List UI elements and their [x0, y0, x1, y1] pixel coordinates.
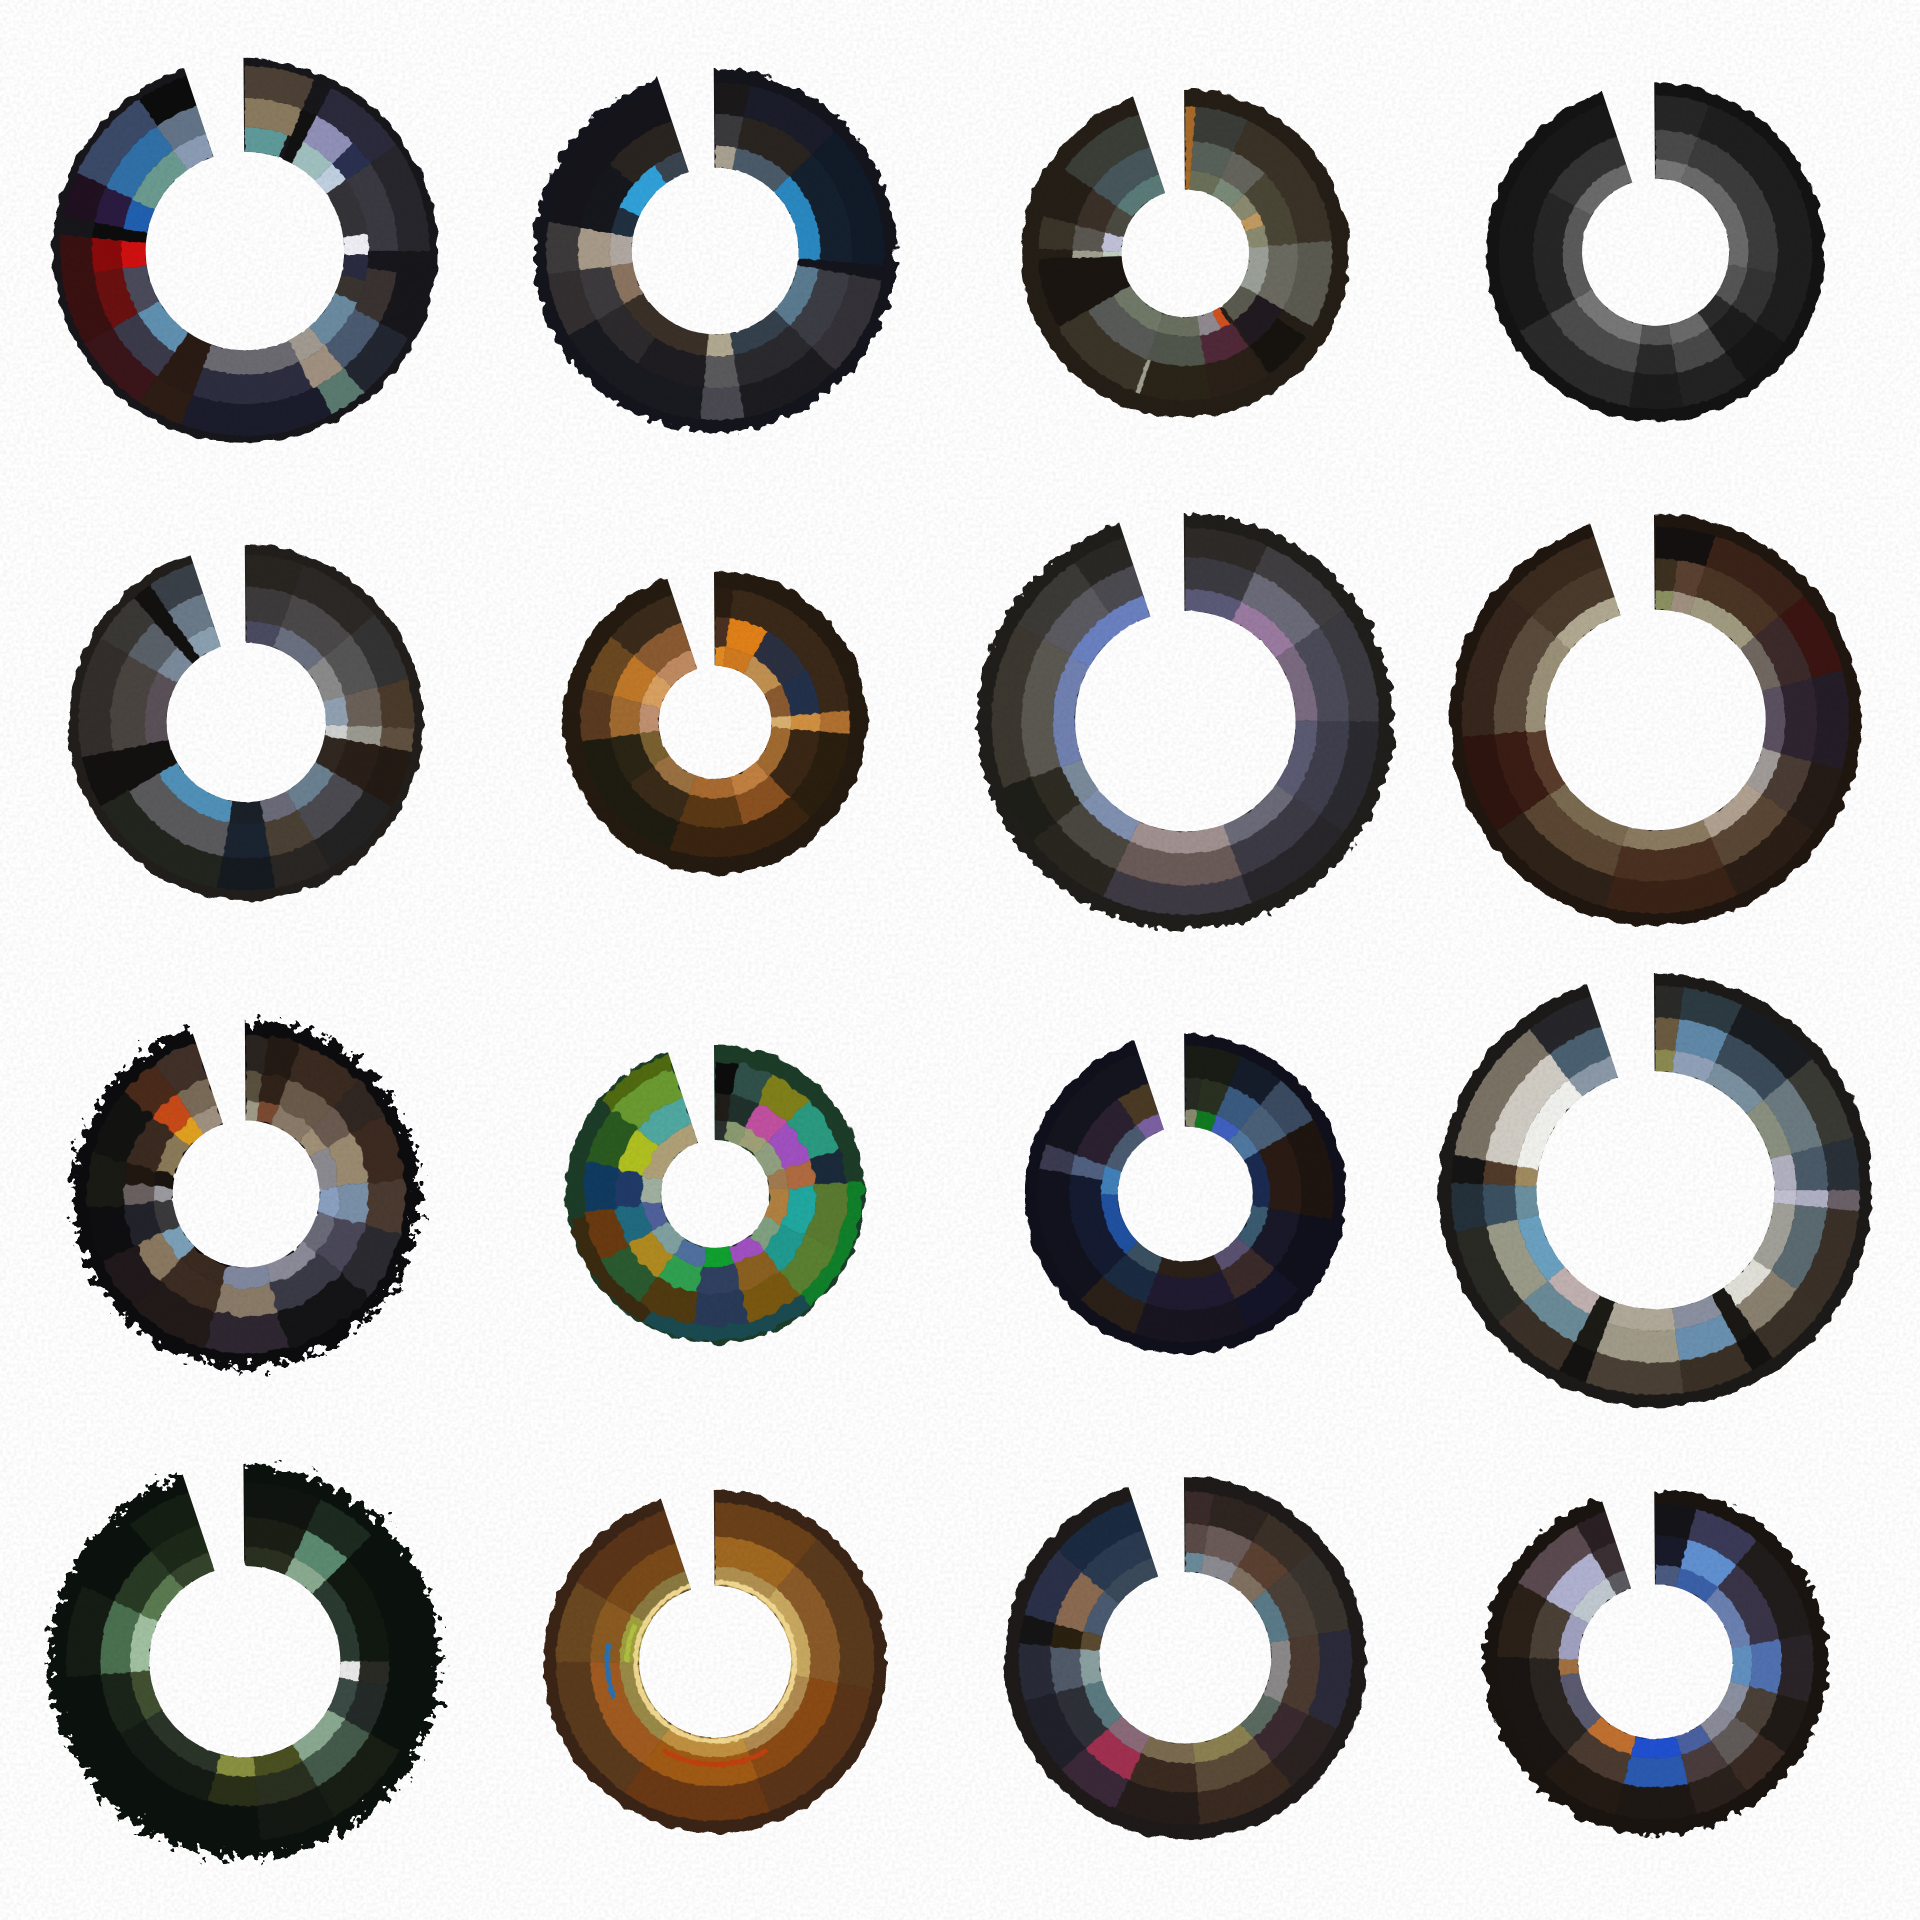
ring 12 [1467, 1002, 1844, 1379]
ring 9 [105, 1053, 387, 1335]
ring 11 gap and hole [1069, 1078, 1302, 1310]
ring 10 [576, 1054, 855, 1333]
ring 11 sectors [1053, 1062, 1318, 1326]
ring 3 gap and hole [1069, 137, 1302, 370]
ring 16 [1513, 1520, 1798, 1804]
ring 1 sectors [76, 82, 414, 420]
ring 13 [83, 1500, 407, 1823]
ring 6 gap and hole [599, 606, 831, 839]
ring 15 [1035, 1507, 1336, 1809]
ring 7 sectors [1007, 542, 1364, 900]
ring 2 [562, 98, 868, 404]
ring 8 gap and hole [1539, 604, 1772, 836]
ring 15 sectors [1035, 1507, 1336, 1809]
ring 6 sectors [595, 602, 835, 842]
ring 3 sectors [1056, 124, 1315, 383]
ring 10 sectors [576, 1054, 855, 1333]
ring 3 [1056, 124, 1315, 383]
ring 12 gap and hole [1537, 1071, 1774, 1309]
ring 5 [94, 571, 398, 874]
ring 8 sectors [1478, 542, 1833, 898]
ring 16 sectors [1513, 1520, 1798, 1804]
ring 16 gap and hole [1539, 1545, 1772, 1778]
ring 5 gap and hole [130, 606, 362, 839]
ring 12 sectors [1467, 1002, 1844, 1379]
ring 13 gap and hole [129, 1545, 361, 1778]
ring 5 sectors [94, 571, 398, 874]
ring 13 sectors [83, 1500, 407, 1823]
ring 10 gap and hole [599, 1078, 831, 1310]
ring 11 [1053, 1062, 1318, 1326]
ring 14 accent stripes [607, 1554, 823, 1769]
ring 4 sectors [1516, 113, 1795, 392]
ring 4 gap and hole [1539, 136, 1772, 369]
ring 8 [1478, 542, 1833, 898]
ring 9 sectors [105, 1053, 387, 1335]
ring 2 sectors [562, 98, 868, 404]
ring 14 sectors [573, 1520, 857, 1804]
ring 14 gap and hole [599, 1545, 831, 1778]
ring 4 [1516, 113, 1795, 392]
ring 6 [595, 602, 835, 842]
ring 15 gap and hole [1069, 1542, 1302, 1774]
ring 1 [76, 82, 414, 420]
ring 1 gap and hole [129, 135, 361, 367]
ring 9 gap and hole [130, 1078, 362, 1310]
ring 7 [1007, 542, 1364, 900]
ring 7 gap and hole [1069, 605, 1302, 838]
ring 14 [573, 1520, 857, 1804]
ring 2 gap and hole [599, 135, 831, 367]
